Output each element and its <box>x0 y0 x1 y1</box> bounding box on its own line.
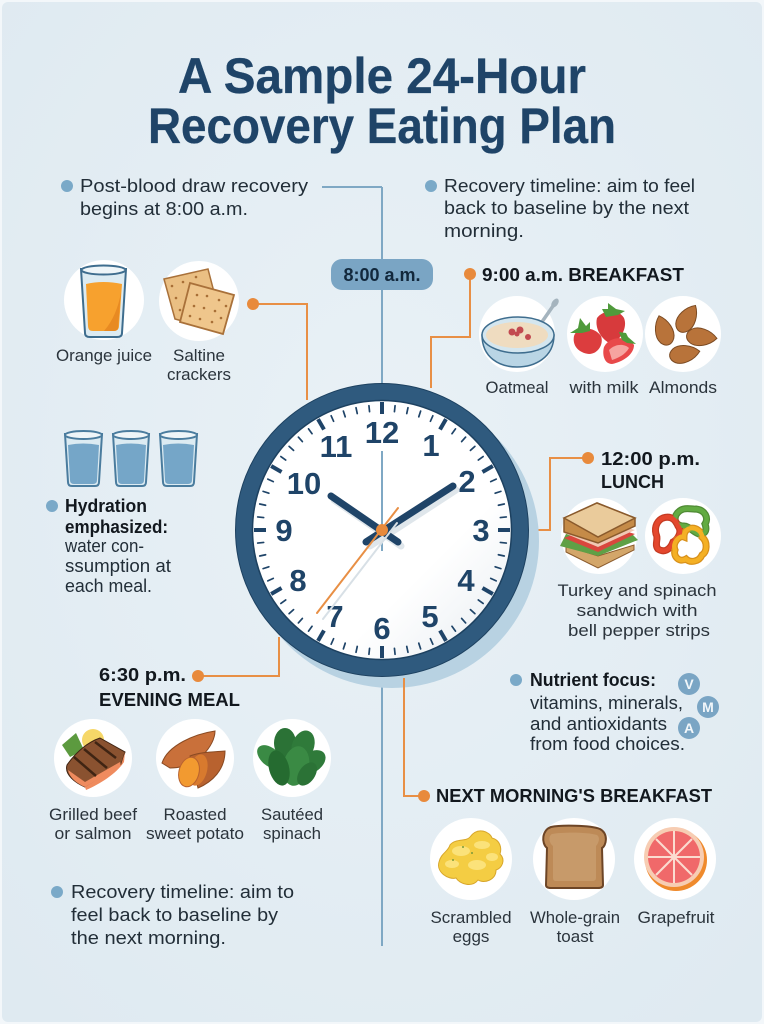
icon: scrambled eggs <box>430 818 512 900</box>
icon: three water glasses <box>65 431 197 486</box>
clock numbers: 11 <box>320 429 352 464</box>
icon: orange juice <box>64 260 144 340</box>
icon: grapefruit <box>634 818 716 900</box>
icon: vitamin badges: M <box>702 699 714 715</box>
heading: next morning's breakfast: NEXT MORNING'S BREAKFAST <box>436 785 713 806</box>
icon: sauteed spinach <box>253 719 331 797</box>
label: turkey sandwich: sandwich with <box>576 601 698 620</box>
text: recovery timeline bottom: the next morning. <box>71 927 226 948</box>
heading: evening meal: 6:30 p.m. <box>99 664 186 685</box>
label: turkey sandwich: bell pepper strips <box>568 621 710 640</box>
label: roasted sweet potato: Roasted <box>164 805 226 824</box>
clock hands <box>317 486 456 619</box>
icon: strawberries <box>567 296 643 372</box>
clock numbers: 9 <box>275 513 293 548</box>
text: hydration emphasized <box>46 495 171 596</box>
clock numbers: 6 <box>373 611 391 646</box>
title <box>148 48 616 154</box>
icon: sweet potato <box>156 719 234 797</box>
text: recovery timeline top: morning. <box>444 220 524 241</box>
clock numbers: 4 <box>457 563 475 598</box>
icon: oatmeal <box>479 296 560 372</box>
heading: evening meal <box>99 664 240 710</box>
text: recovery timeline bottom: feel back to baseline by <box>71 904 279 925</box>
label: saltine crackers <box>167 346 231 384</box>
clock face <box>236 384 528 676</box>
label: scrambled eggs: eggs <box>453 927 489 946</box>
time pill: 8:00 a.m.: 8:00 a.m. <box>343 265 421 285</box>
text: hydration emphasized: ssumption at <box>65 555 171 576</box>
label: orange juice: Orange juice <box>56 346 152 365</box>
connector: evening meal to clock <box>192 637 279 682</box>
text: recovery timeline bottom <box>51 881 294 948</box>
label: turkey sandwich: Turkey and spinach <box>558 581 716 600</box>
connector: snack to clock <box>247 298 307 400</box>
icon: bell pepper strips <box>645 498 721 574</box>
icon: grilled salmon <box>54 719 132 797</box>
label: grilled beef or salmon: or salmon <box>54 824 132 843</box>
clock numbers: 8 <box>289 563 307 598</box>
text: recovery timeline top: back to baseline by the next <box>444 197 689 218</box>
label: whole-grain toast <box>530 908 620 946</box>
heading: lunch <box>601 448 700 492</box>
label: saltine crackers: crackers <box>167 365 231 384</box>
clock numbers: 7 <box>326 599 344 634</box>
text: hydration emphasized: each meal. <box>65 575 152 596</box>
heading: lunch: LUNCH <box>601 471 664 492</box>
label: oatmeal: Oatmeal <box>486 378 548 397</box>
timeline inside clock <box>381 451 383 551</box>
heading: breakfast: 9:00 a.m. BREAKFAST <box>482 264 685 285</box>
label: roasted sweet potato: sweet potato <box>146 824 244 843</box>
text: nutrient focus: from food choices. <box>530 733 685 754</box>
label: whole-grain toast: Whole-grain <box>530 908 620 927</box>
clock shadow <box>245 394 539 688</box>
connector: breakfast to clock <box>431 268 476 388</box>
label: sauteed spinach: Sautéed <box>261 805 323 824</box>
text: nutrient focus <box>510 669 685 754</box>
time pill: 8:00 a.m. <box>331 259 433 290</box>
icon: vitamin badges: A <box>684 720 694 736</box>
heading: evening meal: EVENING MEAL <box>99 689 240 710</box>
clock numbers: 12 <box>365 415 399 450</box>
text: nutrient focus: vitamins, minerals, <box>530 692 683 713</box>
icon: whole-grain toast <box>533 818 615 900</box>
clock numbers: 1 <box>422 428 440 463</box>
text: recovery timeline bottom: Recovery timeline: aim to <box>71 881 294 902</box>
text: recovery timeline top <box>425 175 695 241</box>
label: roasted sweet potato <box>146 805 244 843</box>
hour and minute ticks <box>258 406 506 654</box>
connector: next morning to clock <box>404 678 430 802</box>
clock numbers <box>275 415 490 646</box>
clock numbers: 3 <box>472 513 490 548</box>
icon: saltine crackers <box>159 261 239 341</box>
text: nutrient focus: Nutrient focus: <box>530 669 656 690</box>
clock numbers: 2 <box>458 464 476 499</box>
connector: start note to timeline <box>322 186 382 188</box>
label: sauteed spinach: spinach <box>263 824 321 843</box>
label: scrambled eggs: Scrambled <box>430 908 512 927</box>
text: hydration emphasized: Hydration <box>65 495 147 516</box>
icon: turkey sandwich <box>560 498 638 574</box>
label: with milk: with milk <box>568 378 639 397</box>
label: grapefruit: Grapefruit <box>638 908 715 927</box>
label: turkey sandwich <box>558 581 716 640</box>
text: hydration emphasized: water con- <box>64 535 144 556</box>
label: whole-grain toast: toast <box>557 927 594 946</box>
label: sauteed spinach <box>261 805 323 843</box>
heading: lunch: 12:00 p.m. <box>601 448 700 469</box>
timeline vertical line <box>381 187 383 946</box>
text: recovery start note: Post-blood draw recovery <box>80 175 309 196</box>
title: A Sample 24-Hour <box>178 48 586 104</box>
title: Recovery Eating Plan <box>148 98 616 154</box>
label: saltine crackers: Saltine <box>173 346 225 365</box>
label: almonds: Almonds <box>649 378 717 397</box>
text: recovery timeline top: Recovery timeline: aim to feel <box>444 175 695 196</box>
label: grilled beef or salmon: Grilled beef <box>49 805 137 824</box>
connector: lunch to clock <box>528 452 594 530</box>
text: hydration emphasized: emphasized: <box>65 516 168 537</box>
clock <box>236 384 539 688</box>
text: recovery start note: begins at 8:00 a.m. <box>80 198 248 219</box>
clock numbers: 10 <box>287 466 321 501</box>
clock numbers: 5 <box>421 599 439 634</box>
icon: almonds <box>645 296 721 372</box>
icon: vitamin badges: V <box>684 676 694 692</box>
label: scrambled eggs <box>430 908 512 946</box>
icon: vitamin badges <box>678 673 719 739</box>
text: recovery start note <box>61 175 309 219</box>
text: nutrient focus: and antioxidants <box>530 713 667 734</box>
label: grilled beef or salmon <box>49 805 137 843</box>
